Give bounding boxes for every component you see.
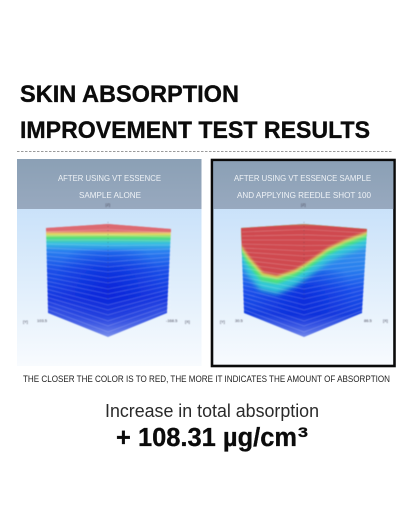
axis labels: -168.5 (166, 318, 178, 323)
axis labels (23, 202, 190, 324)
axis labels: 86.5 (364, 318, 373, 323)
chart: 3D absorption cube, with Reedle Shot (220, 202, 388, 340)
axis labels: [Y] (23, 319, 28, 324)
title (20, 81, 370, 144)
axis labels: [X] (383, 318, 388, 323)
panel header: with Reedle Shot: AFTER USING VT ESSENCE SAMPLE (234, 173, 371, 183)
chart: 3D absorption cube, sample alone (23, 202, 190, 337)
result value: 3 (298, 424, 308, 440)
axis labels (220, 202, 388, 324)
panel: VT essence sample and Reedle Shot 100 (212, 160, 394, 366)
panel header: sample alone: AFTER USING VT ESSENCE (58, 173, 161, 183)
panel header: sample alone (17, 159, 202, 209)
axis labels: 30.5 (235, 318, 244, 323)
axis labels: [Z] (301, 202, 306, 207)
axis labels: [Z] (106, 202, 110, 207)
panel header: with Reedle Shot: AND APPLYING REEDLE SHOT 100 (237, 190, 371, 200)
axis labels: [X] (185, 319, 190, 324)
axis labels: [Y] (220, 319, 225, 324)
panel header: sample alone: SAMPLE ALONE (79, 190, 141, 200)
title: SKIN ABSORPTION (20, 81, 239, 108)
result value: + 108.31 µg/cm (116, 424, 297, 452)
axis labels: 103.5 (37, 318, 48, 323)
result label: Increase in total absorption (105, 401, 319, 421)
title: IMPROVEMENT TEST RESULTS (20, 117, 370, 144)
panel header: with Reedle Shot (213, 161, 393, 209)
panel: VT essence sample alone (17, 159, 202, 366)
